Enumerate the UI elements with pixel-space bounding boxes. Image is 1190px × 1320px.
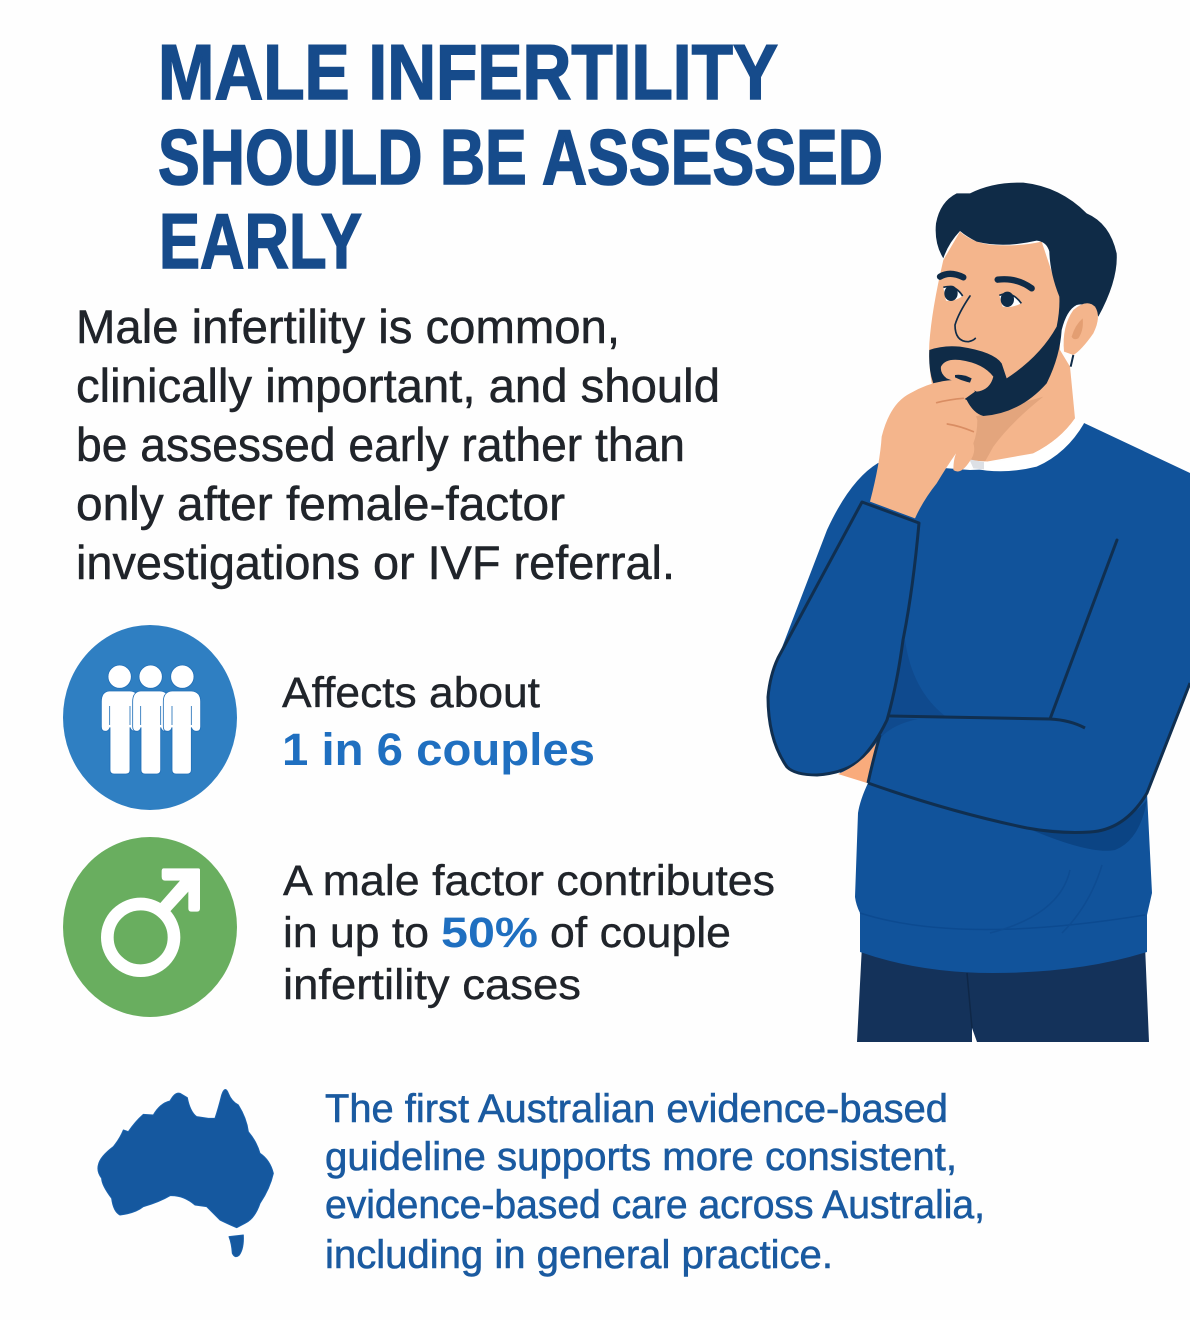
head and hand [870, 183, 1117, 518]
stat: 1 in 6 couples: 1 in 6 couples [282, 724, 595, 775]
hand [870, 380, 977, 518]
title: MALE INFERTILITY [158, 28, 778, 116]
guideline text block: including in general practice. [325, 1233, 833, 1277]
guideline text block [325, 1087, 985, 1277]
icon: three people in blue circle [63, 625, 237, 810]
title: EARLY [159, 197, 362, 285]
stat: male factor up to 50%: in up to [283, 909, 429, 957]
title: SHOULD BE ASSESSED [158, 113, 883, 201]
intro text block: investigations or IVF referral. [76, 536, 675, 589]
hair and beard [929, 183, 1117, 416]
ear [1064, 303, 1098, 367]
icon: male symbol in green circle [63, 837, 237, 1017]
illustration: thoughtful bearded man [768, 183, 1190, 1042]
guideline text block: guideline supports more consistent, [325, 1135, 957, 1179]
guideline text block: evidence-based care across Australia, [325, 1183, 985, 1227]
sweater [768, 423, 1190, 973]
intro text block [76, 300, 720, 589]
guideline text block: The first Australian evidence-based [325, 1087, 948, 1131]
collar [968, 418, 1084, 471]
neck [968, 350, 1075, 462]
eyebrows [940, 274, 1032, 288]
stat: 1 in 6 couples [282, 669, 595, 775]
intro text block: only after female-factor [76, 477, 565, 530]
stat: 1 in 6 couples: Affects about [282, 669, 540, 717]
face [929, 232, 1060, 417]
stat: male factor up to 50% [283, 857, 775, 1009]
intro text block: clinically important, and should [76, 359, 720, 412]
intro text block: be assessed early rather than [76, 418, 685, 471]
intro text block: Male infertility is common, [76, 300, 620, 353]
stat: male factor up to 50%: infertility cases [283, 961, 581, 1009]
title [158, 28, 883, 285]
icon: map of Australia [98, 1090, 273, 1257]
stat: male factor up to 50%: 50% [441, 909, 538, 957]
stat: male factor up to 50%: of couple [550, 909, 731, 957]
trousers [857, 945, 1149, 1042]
nose [955, 296, 975, 342]
stat: male factor up to 50%: A male factor contributes [283, 857, 775, 905]
chin and lip [941, 360, 993, 392]
eyes [943, 286, 1021, 307]
